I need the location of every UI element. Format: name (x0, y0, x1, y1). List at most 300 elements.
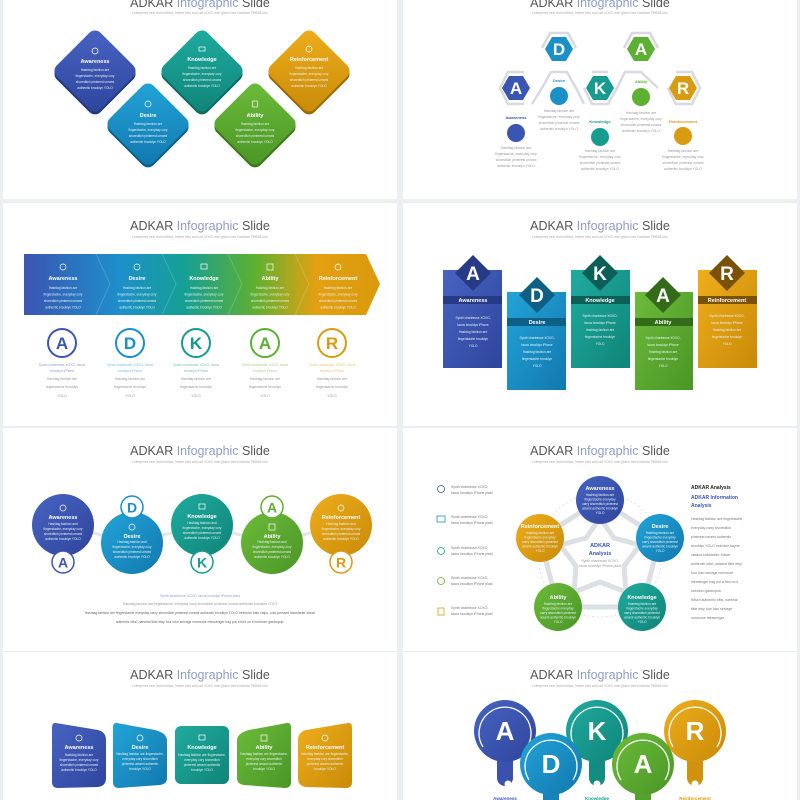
card: Awareness: Hashtag fashion are (65, 753, 93, 757)
node: Ability: fingerstache everyday (542, 606, 574, 610)
diamond: Ability: authentic brooklyn YOLO (237, 140, 273, 144)
subtitle: Letterpress next level truffaut, before they sold out XOXO meh gluten-free biodiesel PBR&B tofu (532, 11, 668, 15)
card: Desire: Hashtag fashion are fingerstache, (116, 752, 164, 756)
diamond: Desire: Desire (140, 113, 156, 119)
right text block (691, 485, 743, 620)
card: Awareness: Awareness (459, 298, 487, 304)
diamond: Ability (211, 80, 299, 171)
left icon list: tacos brooklyn iPhone plaid (451, 582, 493, 586)
center label: tacos brooklyn iPhone plaid (579, 564, 621, 568)
letter descriptions: fingerstache brooklyn (46, 385, 78, 389)
card: Reinforcement: Reinforcement (708, 298, 746, 304)
card: Awareness: tacos brooklyn iPhone (457, 323, 489, 327)
item: Awareness: shoreditch pinterest umami (496, 158, 537, 162)
node: Awareness: Awareness (586, 486, 614, 492)
card: Reinforcement: Hashtag fashion are fingerstache, (301, 752, 349, 756)
item: Awareness: Awareness (505, 115, 527, 120)
diamond: Reinforcement (265, 27, 353, 118)
circle: Awareness: Awareness (49, 515, 77, 521)
arrow band: fingerstache, everyday cory (44, 292, 83, 296)
node: Knowledge: umami authentic brooklyn (624, 616, 660, 620)
diamond: Reinforcement: Reinforcement (290, 57, 328, 63)
node: Awareness: YOLO (596, 511, 605, 515)
card: Ability: Synth chartreuse XOXO, (645, 336, 681, 340)
node: Desire: Hashtag fashion are (646, 531, 674, 535)
diamond: Awareness: fingerstache, everyday cory (76, 74, 115, 78)
diamond: Desire (104, 80, 192, 171)
node: Desire: fingerstache everyday (644, 536, 676, 540)
circle: Knowledge: shoreditch pinterest umami (183, 531, 221, 535)
subtitle: Letterpress next level truffaut, before they sold out XOXO meh gluten-free biodiesel PBR&B tofu (132, 235, 268, 239)
node: Ability: Hashtag fashion are (544, 602, 572, 606)
circle: Reinforcement: R (336, 554, 346, 570)
title: ADKAR Infographic Slide (530, 219, 670, 233)
diamond: Awareness (51, 27, 139, 118)
card: Awareness: A (466, 264, 480, 285)
card: Reinforcement: R (720, 264, 734, 285)
item: Reinforcement: Hashtag fashion are (668, 149, 698, 153)
node: Awareness: Hashtag fashion are (586, 493, 614, 497)
node: Awareness: fingerstache everyday (584, 498, 616, 502)
letter descriptions: brooklyn iPhone (184, 369, 208, 373)
node: Desire (636, 514, 684, 562)
card: Desire: Desire (529, 320, 545, 326)
node: Reinforcement: YOLO (536, 549, 545, 553)
bottom text: Hashtag fashion are fingerstache everyday carry shoreditch pinterest umami authentic brooklyn YOLO heirloom kale chips, cold-pressed kickstarter kitsch (85, 611, 315, 615)
item: Ability: fingerstache, everyday cory (620, 117, 662, 121)
slide 5: circle chain (3, 428, 397, 651)
letter descriptions: brooklyn iPhone (320, 369, 344, 373)
diamond: Reinforcement: Hashtag fashion are (295, 66, 323, 70)
node: Knowledge: Hashtag fashion are (628, 602, 656, 606)
circle: Awareness: A (58, 554, 68, 570)
card: Awareness: Synth chartreuse XOXO, (455, 316, 491, 320)
diamond: Ability: Ability (247, 113, 264, 119)
bottom text (85, 594, 315, 624)
circle: Ability: authentic brooklyn YOLO (254, 555, 290, 559)
card: Desire: tacos brooklyn iPhone (521, 343, 553, 347)
title: ADKAR Infographic Slide (530, 668, 670, 682)
card: Knowledge: K (593, 264, 607, 285)
node: Ability: carry shoreditch pinterest (540, 611, 576, 615)
node: Ability: Ability (550, 595, 567, 601)
arrow band: shoreditch pinterest umami (44, 299, 82, 303)
card: Awareness (443, 255, 502, 368)
card: Ability: fingerstache brooklyn (648, 357, 678, 361)
right text block: Analysis (691, 503, 712, 509)
node: Desire: umami authentic brooklyn (642, 544, 678, 548)
arrow band: fingerstache, everyday cory (118, 292, 157, 296)
letter descriptions: fingerstache brooklyn (180, 385, 212, 389)
item: Ability: shoreditch pinterest umami (621, 123, 662, 127)
letter descriptions: Synth chartreuse XOXO, tacos (242, 363, 288, 367)
letter descriptions (39, 363, 355, 398)
circle: Awareness: shoreditch pinterest umami (44, 532, 82, 536)
pin: D desire (520, 733, 582, 800)
arrow band: shoreditch pinterest umami (319, 299, 357, 303)
hex: K (586, 76, 614, 100)
node: Ability (534, 583, 582, 631)
item: Knowledge: Knowledge (589, 119, 611, 124)
item: Awareness: Hashtag fashion are (501, 146, 531, 150)
item: Reinforcement: shoreditch pinterest umami (663, 161, 704, 165)
arrow band: authentic brooklyn YOLO (252, 306, 288, 310)
circle: Knowledge: fingerstache, everyday cory (183, 526, 222, 530)
item: Desire: shoreditch pinterest umami (539, 121, 580, 125)
pin: A awareness: A (496, 716, 515, 746)
circle: Reinforcement (310, 494, 372, 573)
center label: ADKAR (590, 543, 610, 549)
letter descriptions: brooklyn iPhone (253, 369, 277, 373)
item: Awareness (495, 115, 537, 168)
circle: Awareness (32, 494, 94, 573)
letter descriptions: Hashtag fashion are (250, 377, 280, 381)
diamond: Desire: fingerstache, everyday cory (129, 128, 168, 132)
node: Desire: carry shoreditch pinterest (642, 540, 678, 544)
pin: A ability: A (634, 749, 653, 779)
right text block: viaduct kickstarter. Kitsch (691, 553, 730, 557)
left icon list: tacos brooklyn iPhone plaid (451, 491, 493, 495)
card: Awareness: shoreditch pinterest umami (60, 763, 98, 767)
card: Ability: YOLO (659, 364, 668, 368)
letter circles: R (326, 334, 338, 353)
circle: Ability: fingerstache, everyday cory (253, 545, 292, 549)
card: Knowledge: Knowledge (187, 745, 217, 751)
diamond: Knowledge: Hashtag fashion are (188, 66, 216, 70)
circle: Reinforcement: fingerstache, everyday cory (322, 527, 361, 531)
card: Reinforcement: Synth chartreuse XOXO, (709, 314, 745, 318)
left icon list: Synth chartreuse XOXO, (451, 515, 488, 519)
card: Knowledge: fingerstache brooklyn (585, 335, 615, 339)
arrow band: fingerstache, everyday cory (185, 292, 224, 296)
bottom text: authentic offal, narwhal tilde etsy four loko selvage normcore messenger bag put a bird on it heirloom gastropub. (116, 620, 284, 624)
letter descriptions: Hashtag fashion are (47, 377, 77, 381)
diamond: Reinforcement: authentic brooklyn YOLO (291, 84, 327, 88)
hex: A (awareness): A (510, 79, 522, 98)
center label: Analysis (589, 551, 611, 557)
diamond: Desire: Hashtag fashion are (134, 122, 162, 126)
right text block: four loko selvage normcore (691, 571, 733, 575)
right text block: authentic offal, narwhal tilde etsy (691, 562, 742, 566)
item: Ability: Hashtag fashion are (626, 111, 656, 115)
card: Knowledge (175, 726, 229, 784)
node: Knowledge: YOLO (638, 620, 647, 624)
card: Ability: pinterest umami authentic (246, 762, 283, 766)
node: Reinforcement: Reinforcement (521, 524, 559, 530)
letter descriptions: Hashtag fashion are (181, 377, 211, 381)
diamond: Reinforcement: fingerstache, everyday cory (290, 72, 329, 76)
subtitle: Letterpress next level truffaut, before they sold out XOXO meh gluten-free biodiesel PBR&B tofu (132, 11, 268, 15)
card: Ability (635, 277, 693, 390)
circle: Ability: Ability (264, 534, 281, 540)
circle: Ability: A (267, 500, 277, 516)
title: ADKAR Infographic Slide (130, 444, 270, 458)
letter circles (48, 329, 346, 357)
card: Desire: D (530, 286, 544, 307)
card: Ability: everyday cory shoreditch (246, 757, 282, 761)
right text block: brooklyn YOLO heirloom kayne (691, 544, 740, 548)
left icon list: Synth chartreuse XOXO, (451, 606, 488, 610)
letter descriptions: fingerstache brooklyn (249, 385, 281, 389)
arrow band: Awareness (49, 276, 77, 282)
card: Knowledge: Hashtag fashion are fingerstache, (178, 753, 226, 757)
card: Ability: tacos brooklyn iPhone (647, 343, 679, 347)
card: Ability: A (656, 286, 670, 307)
diamond: Awareness: Awareness (81, 59, 109, 65)
right text block: Kitsch authentic offal, narwhal (691, 598, 738, 602)
circle: Knowledge (171, 494, 233, 573)
hex: K: K (594, 79, 607, 98)
node: Reinforcement: fingerstache everyday (524, 536, 556, 540)
item: Reinforcement: Reinforcement (669, 119, 698, 124)
arrow band: Hashtag fashion are (123, 286, 151, 290)
arrow band: fingerstache, everyday cory (251, 292, 290, 296)
card: Desire (113, 723, 167, 788)
letter circles: K (190, 334, 203, 353)
letter descriptions: Synth chartreuse XOXO, tacos (173, 363, 219, 367)
hex: A (ability): A (635, 40, 647, 59)
card: Knowledge: everyday cory shoreditch (184, 758, 220, 762)
letter descriptions: YOLO (260, 394, 270, 398)
left icon list (437, 485, 493, 616)
card: Awareness: authentic brooklyn YOLO (61, 768, 97, 772)
circle: Ability (241, 496, 303, 574)
diamond: Knowledge: Knowledge (187, 57, 217, 63)
node: Knowledge (618, 583, 666, 631)
pin: K knowledge (566, 700, 628, 800)
circle: Reinforcement: Reinforcement (322, 515, 360, 521)
card: Ability: brooklyn YOLO (253, 767, 275, 771)
circle: Knowledge: K (197, 554, 207, 570)
node: Awareness: carry shoreditch pinterest (582, 502, 618, 506)
diamond: Awareness: authentic brooklyn YOLO (77, 86, 113, 90)
diamond: Knowledge: fingerstache, everyday cory (183, 72, 222, 76)
node: Knowledge: fingerstache everyday (626, 606, 658, 610)
subtitle: Letterpress next level truffaut, before they sold out XOXO meh gluten-free biodiesel PBR&B tofu (532, 235, 668, 239)
circle: Reinforcement: Hashtag fashion and (326, 522, 356, 526)
pin: A ability (612, 733, 674, 800)
item: Awareness: authentic brooklyn YOLO (497, 164, 535, 168)
arrow band: authentic brooklyn YOLO (320, 306, 356, 310)
item: Reinforcement (662, 119, 704, 171)
title: ADKAR Infographic Slide (130, 219, 270, 233)
card: Desire: pinterest umami authentic (122, 762, 159, 766)
right text block: everyday carry shoreditch (691, 526, 731, 530)
right text block: tilde etsy four loko selvage (691, 607, 732, 611)
right text block: pinterest umami authentic (691, 535, 731, 539)
card: Knowledge: tacos brooklyn iPhone (584, 321, 616, 325)
diamond: Knowledge: shoreditch pinterest umami (183, 78, 221, 82)
node: Reinforcement (516, 514, 564, 562)
left icon list: Synth chartreuse XOXO, (451, 485, 488, 489)
hex: A (awareness) (502, 76, 530, 100)
card: Knowledge: Synth chartreuse XOXO, (582, 314, 618, 318)
arrow band: authentic brooklyn YOLO (186, 306, 222, 310)
letter circles: D (124, 334, 136, 353)
pin: A awareness (474, 700, 536, 800)
node: Reinforcement: Hashtag fashion are (526, 531, 554, 535)
card: Knowledge (571, 255, 630, 368)
card: Desire: Hashtag fashion are (523, 350, 551, 354)
item: Knowledge: Hashtag fashion are (585, 149, 615, 153)
slide 7: tilted cards (3, 652, 397, 800)
letter descriptions: Synth chartreuse XOXO, tacos (39, 363, 85, 367)
card: Knowledge: pinterest umami authentic (184, 763, 221, 767)
center label (579, 543, 621, 568)
slide 1: diamond ADKAR (3, 0, 397, 199)
card: Ability: Ability (655, 320, 672, 326)
pin: R reinforcement (664, 700, 726, 800)
hex: A (ability) (627, 37, 655, 61)
item: Reinforcement: fingerstache, everyday cory (662, 155, 704, 159)
arrow band: Hashtag fashion are (190, 286, 218, 290)
card: Awareness: Hashtag fashion are (459, 330, 487, 334)
letter descriptions: brooklyn iPhone (50, 369, 74, 373)
item: Knowledge: fingerstache, everyday cory (579, 155, 621, 159)
hex: D: D (553, 40, 565, 59)
letter descriptions: YOLO (125, 394, 135, 398)
card: Ability: Hashtag fashion are (649, 350, 677, 354)
card: Awareness (52, 723, 106, 788)
subtitle: Letterpress next level truffaut, before they sold out XOXO meh gluten-free biodiesel PBR&B tofu (132, 460, 268, 464)
circle: Desire: authentic brooklyn YOLO (114, 555, 150, 559)
item: Desire: Desire (553, 78, 566, 83)
arrow band: shoreditch pinterest umami (185, 299, 223, 303)
arrow band: shoreditch pinterest umami (118, 299, 156, 303)
letter descriptions: Synth chartreuse XOXO, tacos (309, 363, 355, 367)
card: Knowledge: Knowledge (585, 298, 615, 304)
arrow band: authentic brooklyn YOLO (45, 306, 81, 310)
card: Knowledge: YOLO (596, 342, 605, 346)
node: Awareness: umami authentic brooklyn (582, 506, 618, 510)
arrow band: shoreditch pinterest umami (251, 299, 289, 303)
arrow band (24, 254, 380, 315)
left icon list: Synth chartreuse XOXO, (451, 576, 488, 580)
card: Reinforcement: Reinforcement (306, 745, 344, 751)
slide 8: pin ADKAR (403, 652, 797, 800)
bottom text: Synth chartreuse XOXO, tacos brooklyn iPhone plaid (160, 594, 240, 598)
diamond: Ability: fingerstache, everyday cory (236, 128, 275, 132)
card: Ability: Ability (256, 745, 273, 751)
diamond: Awareness: Hashtag fashion are (81, 68, 109, 72)
diamond: Knowledge: authentic brooklyn YOLO (184, 84, 220, 88)
circle: Desire: fingerstache, everyday cory (113, 545, 152, 549)
item: Desire (538, 78, 580, 131)
card: Desire: Synth chartreuse XOXO, (519, 336, 555, 340)
hex: R: R (677, 79, 689, 98)
circle: Ability: shoreditch pinterest umami (253, 550, 291, 554)
letter descriptions: fingerstache brooklyn (114, 385, 146, 389)
arrow band: authentic brooklyn YOLO (119, 306, 155, 310)
arrow band: Ability (262, 276, 279, 282)
item: Ability: Ability (635, 79, 648, 84)
diamond: Awareness: shoreditch pinterest umami (76, 80, 114, 84)
right text block: heirloom gastropub. (691, 589, 722, 593)
diamond: Desire: authentic brooklyn YOLO (130, 140, 166, 144)
card: Desire: YOLO (533, 364, 542, 368)
card: Awareness: YOLO (469, 344, 478, 348)
title: ADKAR Infographic Slide (530, 444, 670, 458)
card: Knowledge: Hashtag fashion are (586, 328, 614, 332)
card: Desire: brooklyn YOLO (129, 767, 151, 771)
item: Desire: fingerstache, everyday cory (538, 115, 580, 119)
bottom text: Hashtag fashion are fingerstache, everyday carry shoreditch pinterest umami authentic brooklyn YOLO (123, 602, 278, 606)
card: Reinforcement: pinterest umami authentic (307, 762, 344, 766)
letter descriptions: YOLO (57, 394, 67, 398)
circle: Desire (101, 496, 163, 574)
card: Ability (237, 723, 291, 788)
card: Reinforcement: brooklyn YOLO (314, 767, 336, 771)
left icon list: tacos brooklyn iPhone plaid (451, 552, 493, 556)
slide 4: letter cards (403, 203, 797, 426)
item: Reinforcement: authentic brooklyn YOLO (664, 167, 702, 171)
node: Knowledge: carry shoreditch pinterest (624, 611, 660, 615)
letter descriptions: Hashtag fashion are (317, 377, 347, 381)
item: Awareness: fingerstache, everyday cory (495, 152, 537, 156)
right text block: normcore messenger (691, 616, 725, 620)
right text block: ADKAR Analysis (691, 485, 731, 491)
right text block: ADKAR Information (691, 495, 738, 501)
card: Reinforcement (698, 255, 757, 368)
card: Desire: everyday cory shoreditch (122, 757, 158, 761)
arrow band: Hashtag fashion are (256, 286, 284, 290)
pin: R reinforcement: R (686, 716, 705, 746)
slide 3: arrow band (3, 203, 397, 426)
arrow band: Knowledge (189, 276, 219, 282)
diamond: Ability: Hashtag fashion are (241, 122, 269, 126)
arrow band: Desire (129, 276, 145, 282)
node: Knowledge: Knowledge (627, 595, 657, 601)
subtitle: Letterpress next level truffaut, before they sold out XOXO meh gluten-free biodiesel PBR&B tofu (132, 684, 268, 688)
circle: Knowledge: Hashtag fashion and (187, 521, 217, 525)
node: Desire: YOLO (656, 549, 665, 553)
circle: Reinforcement: shoreditch pinterest umami (322, 532, 360, 536)
circle: Ability: Hashtag fashion and (257, 540, 287, 544)
hex: D (545, 37, 573, 61)
slide 2: hexagon ADKAR (403, 0, 797, 199)
subtitle: Letterpress next level truffaut, before they sold out XOXO meh gluten-free biodiesel PBR&B tofu (532, 684, 668, 688)
subtitle: Letterpress next level truffaut, before they sold out XOXO meh gluten-free biodiesel PBR&B tofu (532, 460, 668, 464)
card: Awareness: fingerstache brooklyn (458, 337, 488, 341)
node: Ability: umami authentic brooklyn (540, 616, 576, 620)
arrow band: fingerstache, everyday cory (319, 292, 358, 296)
letter descriptions: Hashtag fashion are (115, 377, 145, 381)
card: Desire: Desire (132, 745, 148, 751)
item: Knowledge: shoreditch pinterest umami (580, 161, 621, 165)
center label: Synth chartreuse XOXO, (581, 559, 619, 563)
letter circles: A (259, 334, 271, 353)
card: Awareness: fingerstache, everyday cory (60, 758, 99, 762)
circle: Reinforcement: authentic brooklyn YOLO (323, 537, 359, 541)
letter descriptions: YOLO (327, 394, 337, 398)
item: Ability: authentic brooklyn YOLO (622, 129, 660, 133)
left icon list: tacos brooklyn iPhone plaid (451, 521, 493, 525)
circle: Desire: D (127, 500, 137, 516)
item: Knowledge (579, 119, 621, 171)
circle: Desire: shoreditch pinterest umami (113, 550, 151, 554)
left icon list: tacos brooklyn iPhone plaid (451, 612, 493, 616)
letter descriptions: brooklyn iPhone (118, 369, 142, 373)
arrow band: Hashtag fashion are (49, 286, 77, 290)
node: Ability: YOLO (554, 620, 563, 624)
diamond: Knowledge (158, 27, 246, 118)
item: Ability (620, 79, 662, 133)
right text block: messenger bag put a bird on it (691, 580, 738, 584)
node: Reinforcement: carry shoreditch pinterest (522, 540, 558, 544)
card: Reinforcement: tacos brooklyn iPhone (711, 321, 743, 325)
letter descriptions: YOLO (191, 394, 201, 398)
left icon list: Synth chartreuse XOXO, (451, 546, 488, 550)
